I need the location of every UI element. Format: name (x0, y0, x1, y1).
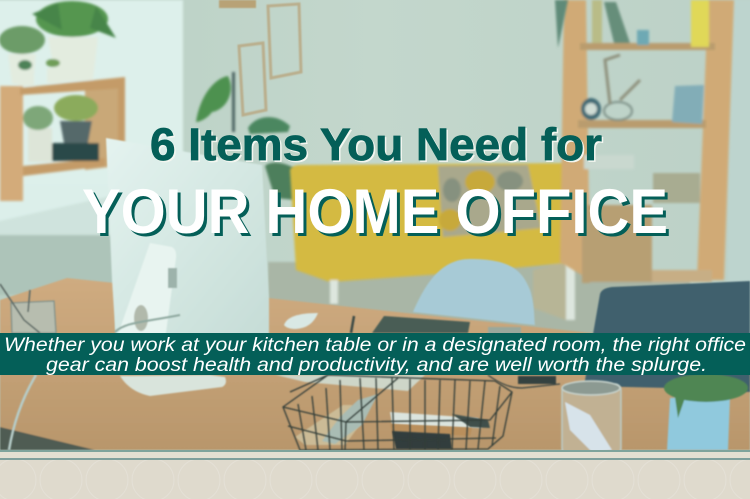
intro banner: gear can boost health and productivity, and are well worth the splurge. (46, 355, 707, 376)
desk (0, 278, 750, 450)
right wood bookshelf (559, 0, 736, 294)
monitor (106, 138, 269, 396)
sofa (290, 163, 579, 320)
intro banner: Whether you work at your kitchen table or in a designated room, the right office (4, 335, 746, 356)
glass with note (562, 381, 621, 454)
blue vase plant (664, 374, 748, 450)
phone and cable at right (518, 376, 556, 384)
desk objects (0, 284, 560, 450)
pen holder (11, 301, 56, 333)
laptop (584, 281, 750, 392)
hanging wall shelf piece (219, 0, 256, 8)
picture frames (239, 4, 301, 115)
window column and sill (0, 0, 184, 294)
title line 1: 6 Items You Need for (152, 120, 604, 172)
blue chair (413, 259, 535, 325)
title line 2: YOUR HOME OFFICE (82, 177, 668, 247)
left shelf with plants (0, 1, 125, 201)
patterned footer band (0, 450, 750, 499)
wire basket (283, 375, 512, 450)
floor under sofa (268, 262, 600, 340)
intro banner (0, 333, 750, 376)
monstera plant (194, 70, 294, 202)
hanging plant (555, 0, 568, 48)
keyboard (276, 375, 425, 391)
mouse, tablet, phone (284, 313, 318, 329)
cable (9, 375, 36, 450)
title line 2: YOUR HOME OFFICE (85, 180, 671, 250)
title line 1: 6 Items You Need for (150, 119, 602, 170)
